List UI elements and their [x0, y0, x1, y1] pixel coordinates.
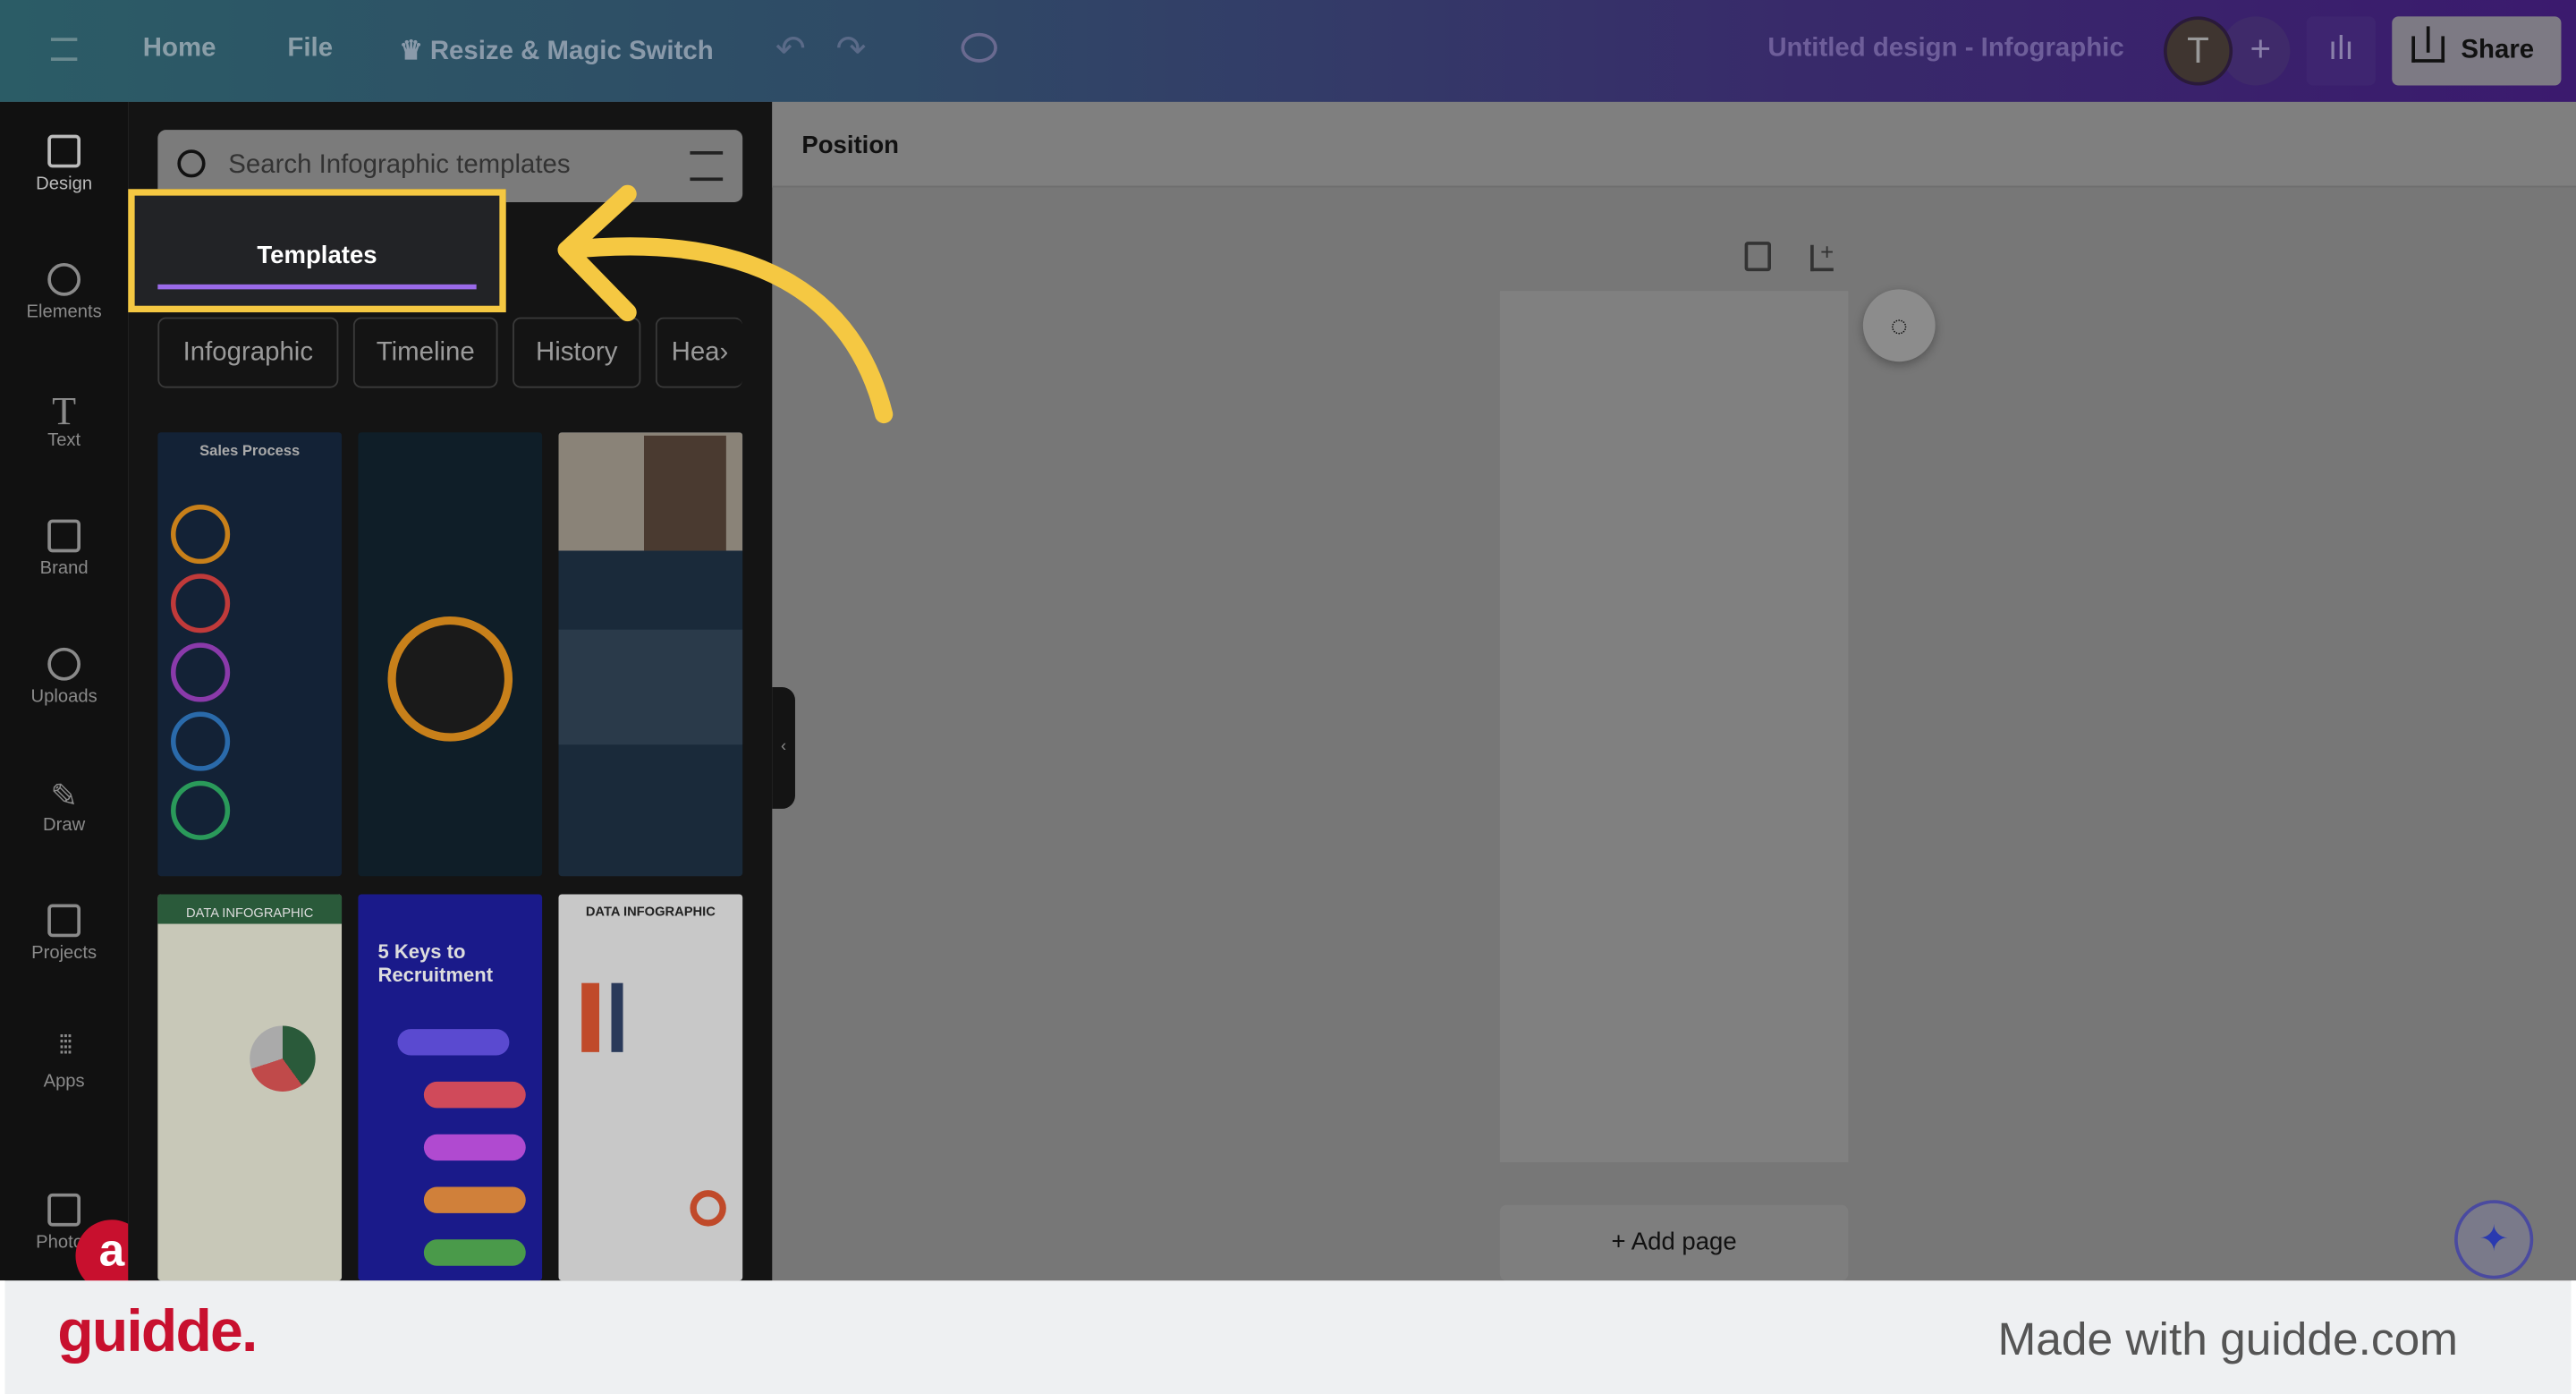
- chip: infographic: Infographic: [183, 338, 313, 367]
- template: sales process: [157, 432, 342, 876]
- avatar: T: [2187, 30, 2209, 71]
- search box: [157, 130, 742, 202]
- avatar: [2164, 16, 2233, 86]
- comment button: [1863, 289, 1936, 361]
- top bar: [0, 0, 2576, 102]
- magic button: [2454, 1200, 2533, 1279]
- template: recruitment: Recruitment: [377, 964, 493, 986]
- side panel: [128, 102, 772, 1280]
- rail: uploads: Uploads: [31, 687, 97, 707]
- collapse handle: ‹: [781, 738, 786, 756]
- add page button: + Add page: [1612, 1228, 1737, 1256]
- template: recruitment: [358, 894, 542, 1280]
- template: data infographic bars: [558, 894, 742, 1280]
- rail: brand: Brand: [40, 559, 89, 579]
- rail: text: T: [52, 391, 76, 434]
- rail: elements: [27, 263, 102, 322]
- rail: draw: ✎: [50, 779, 78, 815]
- rail: apps: ⁞⁞⁞: [58, 1033, 70, 1060]
- position bar: Position: [801, 132, 899, 159]
- magic button: ✦: [2479, 1218, 2509, 1259]
- rail: elements: Elements: [27, 302, 102, 322]
- template: sales process: Sales Process: [199, 442, 300, 459]
- rail: photos: Photos: [36, 1233, 92, 1253]
- search box: Search Infographic templates: [228, 151, 571, 179]
- template: marketing plan: [358, 432, 542, 876]
- rail: apps: Apps: [44, 1072, 85, 1092]
- rail: draw: [43, 779, 86, 835]
- rail: draw: Draw: [43, 815, 85, 835]
- chip: timeline: [353, 318, 498, 388]
- chip: history: History: [536, 338, 617, 367]
- rail: photos: [36, 1194, 92, 1253]
- rail: apps: [43, 1033, 85, 1092]
- template: recruitment: 5 Keys to: [377, 940, 465, 964]
- rail: design: Design: [36, 174, 92, 194]
- cloud icon: [961, 33, 997, 63]
- page actions icons: [1745, 242, 1771, 271]
- template: resume: [558, 432, 742, 876]
- menu icon: [51, 38, 77, 61]
- collapse handle: [772, 687, 795, 809]
- footer: [0, 1280, 2576, 1394]
- template grid: [157, 432, 742, 1281]
- text: +: [1820, 238, 1834, 265]
- add button: [2221, 16, 2290, 86]
- guidde badge: a: [99, 1225, 124, 1276]
- chip: infographic: [157, 318, 338, 388]
- guidde badge: [75, 1220, 148, 1292]
- chip: history: [513, 318, 640, 388]
- yellow highlight: templates tab: [128, 189, 506, 312]
- template: data infographic green: DATA INFOGRAPHIC: [186, 905, 313, 921]
- guidde logo: guidde.: [57, 1297, 257, 1364]
- document title: Untitled design - Infographic: [1767, 35, 2124, 63]
- template: data infographic bars: DATA INFOGRAPHIC: [586, 904, 716, 919]
- rail: text: [47, 391, 80, 450]
- text: 3: [149, 1221, 160, 1245]
- undo redo icons: ↶ ↷: [775, 28, 866, 69]
- chip: health: [656, 318, 742, 388]
- rail: projects: [31, 904, 97, 964]
- chip: health: Hea›: [672, 338, 728, 367]
- analytics button: [2307, 16, 2376, 86]
- footer credit: Made with guidde.com: [1997, 1313, 2458, 1364]
- rail: projects: Projects: [31, 944, 97, 964]
- rail: text: Text: [47, 430, 80, 450]
- analytics button: ılı: [2328, 31, 2354, 67]
- chip: timeline: Timeline: [377, 338, 475, 367]
- rail: design: [36, 134, 92, 194]
- yellow arrow: [558, 184, 893, 424]
- design page: [1500, 291, 1848, 1162]
- add button: +: [2250, 28, 2271, 69]
- position bar: [772, 102, 2576, 187]
- rail: brand: [40, 519, 89, 579]
- left rail: [0, 102, 128, 1280]
- nav: file: File: [287, 35, 333, 63]
- tab label: Templates: [257, 242, 377, 269]
- add page button: [1500, 1205, 1848, 1280]
- comment button: ◌: [1890, 309, 1908, 342]
- nav: resize: ♛ Resize & Magic Switch: [399, 38, 714, 65]
- share button: Share: [2461, 36, 2534, 64]
- template: data infographic green: [157, 894, 342, 1280]
- rail: uploads: [31, 648, 97, 707]
- share button: [2392, 16, 2561, 86]
- nav: home: Home: [143, 35, 216, 63]
- tab underline: [157, 285, 477, 289]
